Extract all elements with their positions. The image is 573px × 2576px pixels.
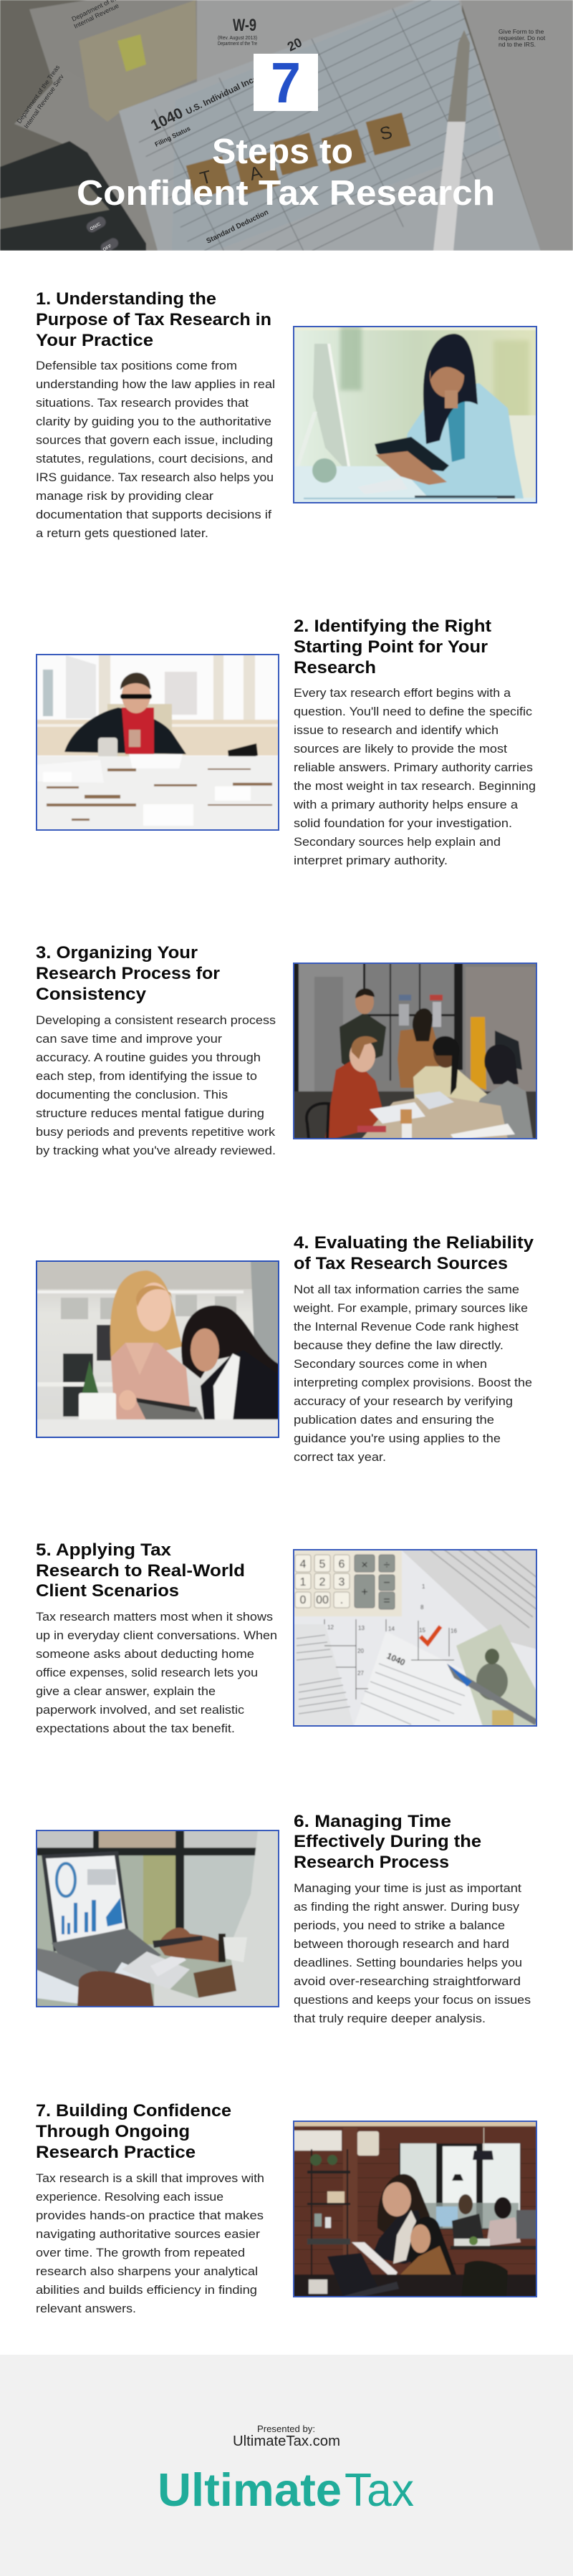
text block: step 7: relevant answers. (36, 2302, 136, 2315)
text block: step 7: experience. Resolving each issue (36, 2191, 223, 2204)
hero form lettering: 1040 (148, 105, 186, 134)
hero banner (0, 0, 573, 251)
photo: calculator, calendar, 1040 form and cash: 15 (419, 1627, 425, 1634)
photo: calculator, calendar, 1040 form and cash: 14 (388, 1626, 395, 1632)
text block: step 4: Secondary sources come in when (294, 1358, 487, 1371)
text block: step 2: solid foundation for your investigation. (294, 817, 512, 830)
heading: step 3: Research Process for (36, 964, 220, 983)
text block: step 7: research also sharpens your analytical (36, 2265, 258, 2278)
heading: step 6: 6. Managing Time (294, 1812, 451, 1831)
hero form lettering: Department of the Treas (15, 64, 62, 125)
text block: step 6: avoid over-researching straightforward (294, 1975, 521, 1988)
title: Steps to (212, 132, 353, 171)
photo: calculator, calendar, 1040 form and cash: 20 (357, 1648, 364, 1654)
text block: step 4: the Internal Revenue Code rank highest (294, 1321, 519, 1333)
heading: step 5: Research to Real-World (36, 1561, 245, 1581)
hero form lettering: Internal Revenue Serv (22, 73, 65, 130)
text block: step 4 (293, 1283, 532, 1464)
text block: step 3: each step, from identifying the issue to (36, 1070, 257, 1083)
heading: step 2: 2. Identifying the Right (294, 617, 491, 636)
text block: step 5: give a clear answer, explain the (36, 1685, 216, 1698)
logo: UltimateTax: Ultimate (158, 2464, 342, 2516)
text block: step 3: structure reduces mental fatigue during (36, 1107, 264, 1120)
hero form lettering: T (198, 167, 213, 189)
presented by text (233, 2423, 340, 2449)
text block: step 1: statutes, regulations, court decisions, and (36, 453, 273, 465)
photo: calculator, calendar, 1040 form and cash: 8 (420, 1604, 424, 1611)
panel: step 4 (36, 1233, 534, 1464)
hero form lettering: A (247, 162, 264, 185)
text block: step 5: expectations about the tax benefit. (36, 1722, 235, 1735)
panel: step 5 (36, 1540, 537, 1735)
heading: step 2: Starting Point for Your (294, 637, 488, 657)
text block: step 5: up in everyday client conversations. When (36, 1629, 277, 1642)
photo: laptop with charts and calculator (36, 1830, 279, 2007)
photo: colleagues in a brick-walled office (293, 2121, 537, 2297)
text block: step 3: busy periods and prevents repetitive work (36, 1126, 276, 1139)
heading: step 1: 1. Understanding the (36, 289, 216, 309)
title (77, 132, 495, 213)
text block: step 3: Developing a consistent research process (36, 1014, 276, 1027)
text block: step 2: the most weight in tax research. Beginning (294, 780, 536, 793)
text block: step 2: Every tax research effort begins with a (294, 687, 511, 700)
hero form lettering: U.S. Individual Income (184, 67, 271, 117)
heading: step 3: 3. Organizing Your (36, 943, 198, 963)
text block: step 3: by tracking what you've already reviewed. (36, 1144, 276, 1157)
hero form lettering: Give Form to the (499, 28, 544, 35)
photo: team meeting at table (293, 963, 537, 1139)
text block: step 7: Tax research is a skill that improves with (36, 2172, 264, 2185)
presented by text: Presented by: (257, 2423, 315, 2434)
text block: step 7: abilities and builds efficiency in finding (36, 2284, 257, 2297)
photo: calculator, calendar, 1040 form and cash: 2 (319, 1576, 326, 1588)
heading: step 5: 5. Applying Tax (36, 1540, 172, 1560)
text block: step 5: office expenses, solid research lets you (36, 1666, 258, 1679)
hero form lettering: Filing Status (153, 125, 191, 148)
text block: step 3: can save time and improve your (36, 1033, 223, 1046)
heading: step 6: Research Process (294, 1853, 449, 1872)
text block: step 4: interpreting complex provisions. Boost the (294, 1376, 532, 1389)
heading: step 3: Consistency (36, 985, 147, 1004)
heading: step 5 (36, 1540, 245, 1601)
hero form lettering: Internal Revenue (72, 2, 120, 30)
hero background photo of tax forms (0, 0, 573, 251)
photo: calculator, calendar, 1040 form and cash: + (361, 1586, 368, 1598)
text block: step 4: because they define the law directly. (294, 1339, 504, 1352)
heading: step 2 (294, 617, 491, 677)
text block: step 6 (294, 1882, 531, 2025)
text block: step 6: that truly require deeper analysis. (294, 2012, 486, 2025)
heading: step 4: 4. Evaluating the Reliability (294, 1233, 534, 1253)
logo: UltimateTax: Tax (345, 2464, 414, 2516)
photo: calculator, calendar, 1040 form and cash: 1040 (385, 1651, 407, 1668)
photo: calculator, calendar, 1040 form and cash: 00 (316, 1594, 329, 1606)
hero form lettering: S (377, 122, 395, 145)
text block: step 5: Tax research matters most when it shows (36, 1611, 273, 1624)
presented by text: UltimateTax.com (233, 2433, 340, 2449)
hero form lettering: nd to the IRS. (499, 41, 536, 48)
footer (0, 2355, 573, 2576)
hero form lettering: (Rev. August 2013) (218, 36, 257, 41)
hero form lettering: ON/C (89, 221, 102, 232)
hero form lettering: W-9 (233, 16, 256, 35)
photo: calculator, calendar, 1040 form and cash: × (361, 1559, 368, 1571)
text block: step 6: questions and keeps your focus on issues (294, 1994, 531, 2007)
photo: calculator, calendar, 1040 form and cash: − (383, 1577, 390, 1589)
text block: step 6: as finding the right answer. During busy (294, 1901, 520, 1914)
photo: calculator, calendar, 1040 form and cash: 0 (300, 1594, 307, 1606)
text block: step 5: paperwork involved, and set realistic (36, 1704, 244, 1717)
photo: two women reviewing a tablet (36, 1260, 279, 1438)
photo: calculator, calendar, 1040 form and cash: 16 (451, 1628, 457, 1634)
text block: step 1: situations. Tax research provides that (36, 397, 249, 410)
photo: calculator, calendar, 1040 form and cash: 27 (357, 1670, 364, 1677)
text block: step 4: weight. For example, primary sources like (293, 1302, 528, 1315)
text block: step 5: someone asks about deducting home (36, 1648, 254, 1661)
heading: step 6: Effectively During the (294, 1832, 481, 1851)
text block: step 1: sources that govern each issue, including (36, 434, 273, 447)
photo: calculator, calendar, 1040 form and cash: 1 (300, 1576, 307, 1588)
text block: step 6: deadlines. Setting boundaries helps you (294, 1957, 522, 1969)
heading: step 4: of Tax Research Sources (294, 1254, 508, 1273)
heading: step 7 (36, 2101, 231, 2162)
photo: calculator, calendar, 1040 form and cash: = (383, 1595, 390, 1607)
heading: step 3 (36, 943, 220, 1004)
text block: step 1 (36, 360, 275, 540)
text block: step 7: provides hands-on practice that makes (36, 2209, 264, 2222)
photo: calculator, calendar, 1040 form and cash: 12 (327, 1624, 334, 1631)
photo: calculator, calendar, 1040 form and cash: 3 (339, 1576, 345, 1588)
hero form lettering (15, 0, 546, 253)
number badge: 7 (271, 51, 301, 115)
photo: calculator, calendar, 1040 form and cash: 1 (422, 1583, 425, 1590)
text block: step 3: accuracy. A routine guides you through (36, 1051, 261, 1064)
photo: calculator, calendar, 1040 form and cash: 5 (319, 1558, 326, 1571)
hero form lettering: Standard Deduction (205, 208, 270, 246)
text block: step 1: clarity by guiding you to the authoritative (36, 415, 271, 428)
photo: calculator, calendar, 1040 form and cash: 4 (300, 1558, 307, 1571)
text block: step 2: question. You'll need to define the specific (294, 705, 532, 718)
photo: calculator, calendar, 1040 form and cash: 6 (339, 1558, 345, 1571)
panel: step 2 (36, 617, 536, 867)
text block: step 2: issue to research and identify which (294, 724, 499, 737)
text block: step 1: IRS guidance. Tax research also helps you (36, 471, 274, 484)
text block: step 4: publication dates and ensuring the (294, 1414, 494, 1427)
text block: step 3: documenting the conclusion. This (36, 1089, 228, 1101)
text block: step 7: navigating authoritative sources easier (36, 2228, 261, 2241)
photo: calculator, calendar, 1040 form and cash: . (340, 1594, 343, 1606)
heading: step 1: Your Practice (36, 331, 153, 350)
text block: step 6: Managing your time is just as important (294, 1882, 521, 1895)
text block: step 1: documentation that supports decisions if (36, 508, 271, 521)
text block: step 5 (36, 1611, 277, 1735)
photo: calculator, calendar, 1040 form and cash: 13 (358, 1625, 365, 1631)
heading: step 6 (294, 1812, 481, 1872)
text block: step 2: with a primary authority helps ensure a (293, 799, 519, 811)
text block: step 2: sources are likely to provide the most (294, 743, 507, 756)
photo: woman surrounded by paperwork (36, 654, 279, 831)
panel: step 1 (36, 289, 537, 540)
photo: calculator, calendar, 1040 form and cash (293, 1549, 537, 1727)
text block: step 1: a return gets questioned later. (36, 527, 208, 540)
text block: step 7: over time. The growth from repeated (36, 2247, 245, 2259)
heading: step 7: 7. Building Confidence (36, 2101, 231, 2121)
number badge (254, 51, 318, 115)
panel: step 3 (36, 943, 537, 1157)
text block: step 4: accuracy of your research by verifying (294, 1395, 513, 1408)
heading: step 5: Client Scenarios (36, 1581, 179, 1601)
text block: step 7 (36, 2172, 264, 2315)
hero form lettering: 20 (285, 35, 304, 54)
text block: step 6: periods, you need to strike a balance (294, 1919, 505, 1932)
photo: woman with tablet at desk (293, 326, 537, 503)
text block: step 4: correct tax year. (294, 1451, 386, 1464)
text block: step 3 (36, 1014, 276, 1157)
text block: step 4: Not all tax information carries the same (294, 1283, 519, 1296)
hero form lettering: requester. Do not (499, 34, 546, 42)
heading: step 2: Research (294, 658, 376, 677)
heading: step 7: Through Ongoing (36, 2122, 190, 2141)
heading: step 1 (36, 289, 271, 350)
hero form lettering: OFF (102, 243, 112, 253)
text block: step 2: reliable answers. Primary authority carries (294, 761, 533, 774)
title: Confident Tax Research (77, 174, 495, 213)
text block: step 1: manage risk by providing clear (36, 490, 214, 503)
heading: step 1: Purpose of Tax Research in (36, 310, 271, 329)
text block: step 1: Defensible tax positions come from (36, 360, 237, 372)
hero form lettering: Department of the Tre (218, 42, 257, 47)
panel: step 7 (36, 2101, 537, 2315)
text block: step 6: between thorough research and hard (294, 1938, 509, 1951)
panel: step 6 (36, 1812, 531, 2025)
photo: calculator, calendar, 1040 form and cash: ÷ (384, 1559, 390, 1571)
text block: step 2: interpret primary authority. (294, 854, 448, 867)
text block: step 2: Secondary sources help explain and (294, 836, 501, 849)
text block: step 1: understanding how the law applies in real (36, 378, 275, 391)
heading: step 4 (294, 1233, 534, 1273)
text block: step 2 (293, 687, 536, 867)
heading: step 7: Research Practice (36, 2143, 196, 2162)
text block: step 4: guidance you're using applies to the (294, 1432, 501, 1445)
